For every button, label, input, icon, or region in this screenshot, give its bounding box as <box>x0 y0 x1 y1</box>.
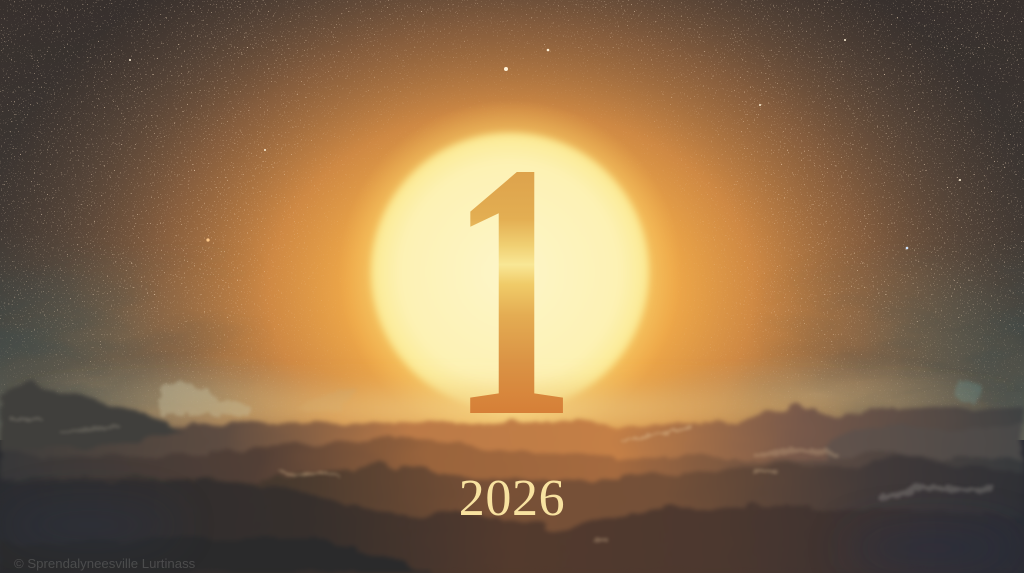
blue mist <box>0 503 180 547</box>
bright stars <box>129 39 961 249</box>
starfield <box>0 0 1024 409</box>
year 2026: 2026 <box>459 470 565 527</box>
sun disc <box>371 133 649 411</box>
clouds near horizon <box>160 381 981 415</box>
cloud wisps <box>10 418 990 540</box>
mountain ranges <box>0 378 1024 573</box>
ground backing <box>0 440 1024 573</box>
near ridge <box>0 480 1024 573</box>
sun glow halo <box>338 100 682 444</box>
left dark peaks <box>0 378 185 450</box>
far ridge <box>0 403 1024 573</box>
lower ridge <box>0 453 1024 573</box>
horizon haze band <box>0 392 1024 428</box>
nebula haze <box>68 322 1024 412</box>
watermark: © Sprendalyneesville Lurtinass <box>14 556 196 571</box>
numeral 1: 1 <box>450 88 576 492</box>
mid ridge <box>0 436 1024 573</box>
right dark ridge <box>820 420 1024 470</box>
foreground ridge <box>0 538 440 573</box>
